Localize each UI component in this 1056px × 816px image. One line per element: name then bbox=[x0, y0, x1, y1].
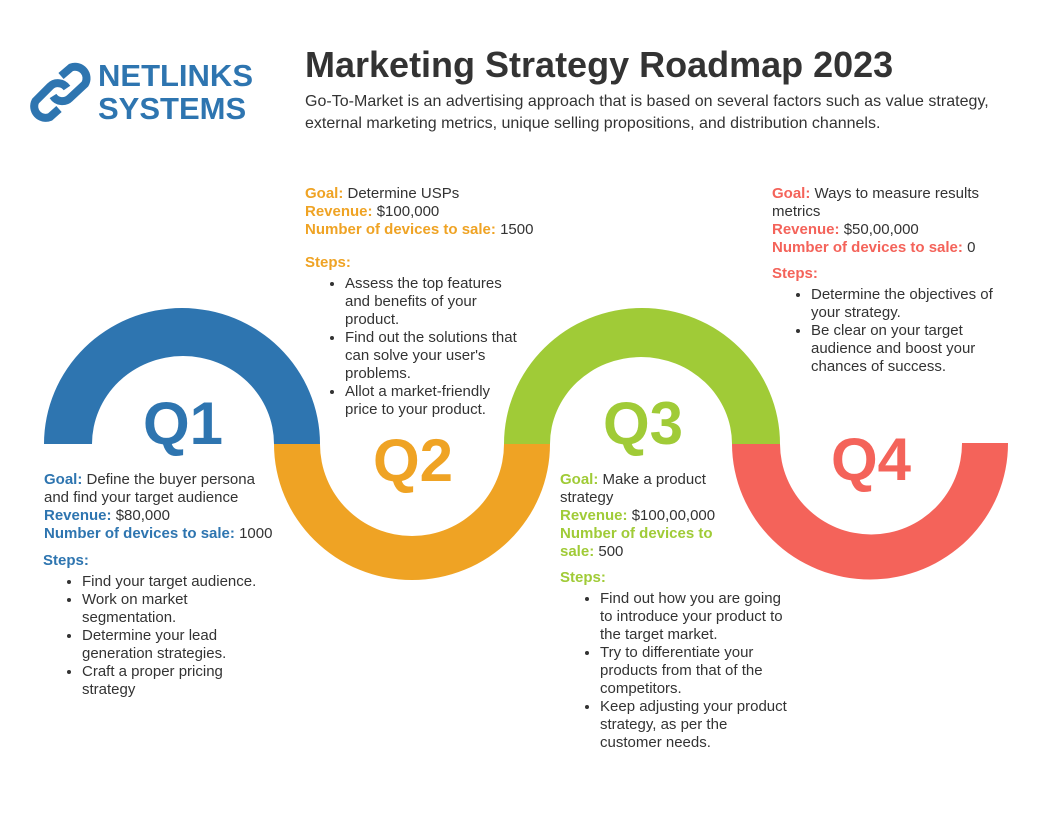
Q1 steps list: Find your target audience. bbox=[82, 573, 256, 590]
Q3 goal and metrics bbox=[560, 471, 715, 560]
Q3 steps list: Keep adjusting your product strategy, as per the customer needs. bbox=[600, 698, 787, 751]
panel: Q3 details bbox=[560, 471, 787, 751]
Q1 steps heading: Steps: bbox=[43, 552, 89, 569]
Q3 steps list bbox=[585, 590, 787, 751]
Q1 goal and metrics: Goal: Define the buyer persona bbox=[44, 471, 255, 488]
label: Q4: Q4 bbox=[831, 426, 911, 493]
arc: Q1 bbox=[44, 308, 320, 444]
arc: Q3 bbox=[504, 308, 780, 444]
subtitle: external marketing metrics, unique selling propositions, and distribution channels. bbox=[305, 115, 880, 132]
Q2 steps list: Find out the solutions that can solve your user's problems. bbox=[345, 329, 517, 382]
panel: Q2 details bbox=[305, 185, 533, 418]
label: Q2: Q2 bbox=[373, 427, 453, 494]
Q2 steps list: Assess the top features and benefits of your product. bbox=[345, 275, 502, 328]
Q4 goal and metrics: Revenue: $50,00,000 bbox=[772, 221, 919, 238]
Q1 goal and metrics: Number of devices to sale: 1000 bbox=[44, 525, 272, 542]
Q3 goal and metrics: Number of devices to sale: 500 bbox=[560, 525, 713, 560]
icon: chain link bbox=[30, 62, 90, 122]
Q4 goal and metrics bbox=[772, 185, 979, 256]
Q2 steps heading: Steps: bbox=[305, 254, 351, 271]
Q1 steps list: Determine your lead generation strategies. bbox=[82, 627, 226, 662]
Q4 goal and metrics: Goal: Ways to measure results metrics bbox=[772, 185, 979, 220]
Q3 steps list: Try to differentiate your products from that of the competitors. bbox=[600, 644, 763, 697]
subtitle bbox=[305, 93, 989, 132]
logo wordmark: NETLINKS bbox=[98, 58, 253, 93]
logo wordmark: SYSTEMS bbox=[98, 91, 246, 126]
Q2 goal and metrics: Revenue: $100,000 bbox=[305, 203, 439, 220]
Q1 steps list bbox=[67, 573, 256, 698]
arc: Q4 bbox=[732, 443, 1008, 580]
Q1 steps list: Work on market segmentation. bbox=[82, 591, 188, 626]
panel: Q1 details bbox=[43, 471, 272, 698]
Q2 steps list: Allot a market-friendly price to your product. bbox=[345, 383, 490, 418]
Q2 goal and metrics bbox=[305, 185, 533, 238]
Q3 goal and metrics: Goal: Make a product strategy bbox=[560, 471, 706, 506]
Q4 steps list: Determine the objectives of your strategy. bbox=[811, 286, 993, 321]
label: Q1: Q1 bbox=[143, 390, 223, 457]
label: Q3: Q3 bbox=[603, 390, 683, 457]
arc: Q2 bbox=[274, 444, 550, 580]
Q3 steps heading: Steps: bbox=[560, 569, 606, 586]
Q1 goal and metrics: Revenue: $80,000 bbox=[44, 507, 170, 524]
logo bbox=[30, 58, 253, 126]
Q3 steps list: Find out how you are going to introduce your product to the target market. bbox=[600, 590, 783, 643]
Q1 goal and metrics: and find your target audience bbox=[44, 489, 238, 506]
Q4 steps list bbox=[796, 286, 993, 375]
logo wordmark bbox=[98, 58, 253, 126]
panel: Q4 details bbox=[772, 185, 993, 375]
subtitle: Go-To-Market is an advertising approach that is based on several factors such as value strategy, bbox=[305, 93, 989, 110]
Q4 goal and metrics: Number of devices to sale: 0 bbox=[772, 239, 975, 256]
Q2 goal and metrics: Goal: Determine USPs bbox=[305, 185, 459, 202]
title: Marketing Strategy Roadmap 2023 bbox=[305, 44, 893, 85]
Q2 steps list bbox=[330, 275, 517, 418]
Q1 goal and metrics bbox=[44, 471, 272, 542]
Q3 goal and metrics: Revenue: $100,00,000 bbox=[560, 507, 715, 524]
Q1 steps list: Craft a proper pricing strategy bbox=[82, 663, 223, 698]
Q4 steps list: Be clear on your target audience and boost your chances of success. bbox=[811, 322, 975, 375]
Q4 steps heading: Steps: bbox=[772, 265, 818, 282]
Q2 goal and metrics: Number of devices to sale: 1500 bbox=[305, 221, 533, 238]
